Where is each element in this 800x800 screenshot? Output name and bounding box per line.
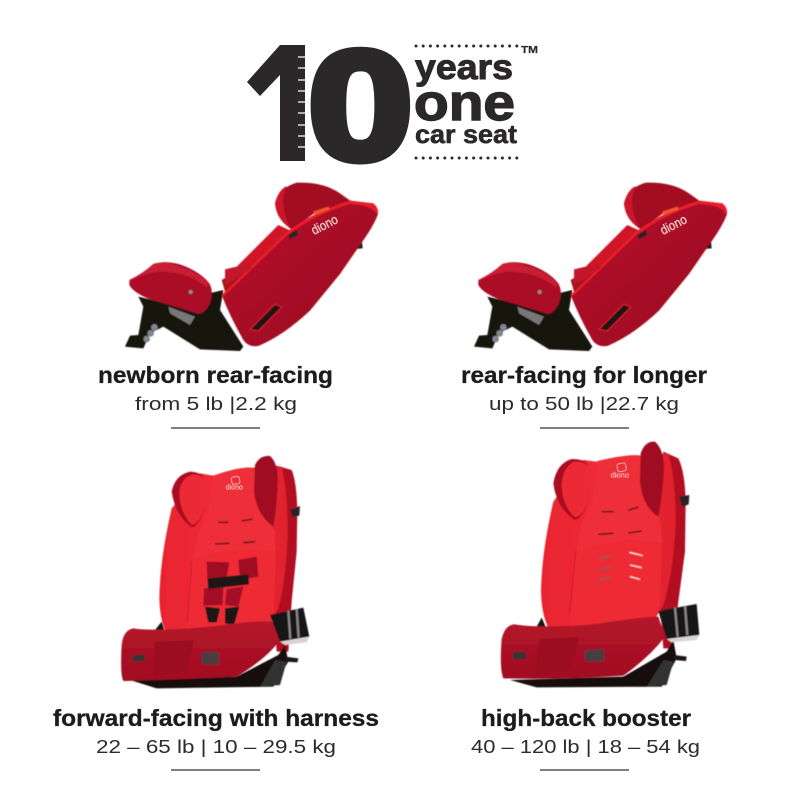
- car seat front view with harness: [121, 456, 309, 688]
- trademark: TM: [521, 44, 538, 56]
- car seat side view, extended: [474, 183, 727, 351]
- brand logo: [611, 463, 629, 479]
- years: years: [415, 48, 513, 87]
- weight range: from 5 lb |2.2 kg: [135, 393, 297, 414]
- car seat front view without harness: [501, 442, 699, 687]
- brand logo: diono: [611, 470, 629, 479]
- brand logo: [226, 476, 243, 492]
- one: one: [414, 74, 515, 131]
- brand mark: diono: [309, 212, 340, 238]
- car seat: car seat: [415, 119, 517, 149]
- panel: forward-facing with harness: [53, 456, 379, 770]
- panel: newborn rear-facing: [98, 183, 378, 428]
- weight range: 40 – 120 lb | 18 – 54 kg: [471, 736, 700, 757]
- heading: newborn rear-facing: [98, 362, 333, 388]
- brand mark: diono: [658, 212, 689, 238]
- car seat side view, recline: [125, 183, 378, 351]
- heading: forward-facing with harness: [53, 705, 379, 731]
- weight range: 22 – 65 lb | 10 – 29.5 kg: [96, 736, 336, 757]
- panel: high-back booster: [471, 442, 700, 770]
- numeral 10 with height ruler: 0: [308, 19, 413, 192]
- heading: rear-facing for longer: [461, 362, 707, 388]
- heading: high-back booster: [481, 705, 691, 731]
- numeral 10 with height ruler: 1: [255, 16, 344, 195]
- weight range: up to 50 lb |22.7 kg: [489, 393, 679, 414]
- numeral 10 with height ruler: [247, 45, 410, 164]
- panel: rear-facing for longer: [461, 183, 727, 428]
- brand logo: diono: [226, 483, 243, 492]
- title logo: 10 years one car seat: [247, 44, 538, 164]
